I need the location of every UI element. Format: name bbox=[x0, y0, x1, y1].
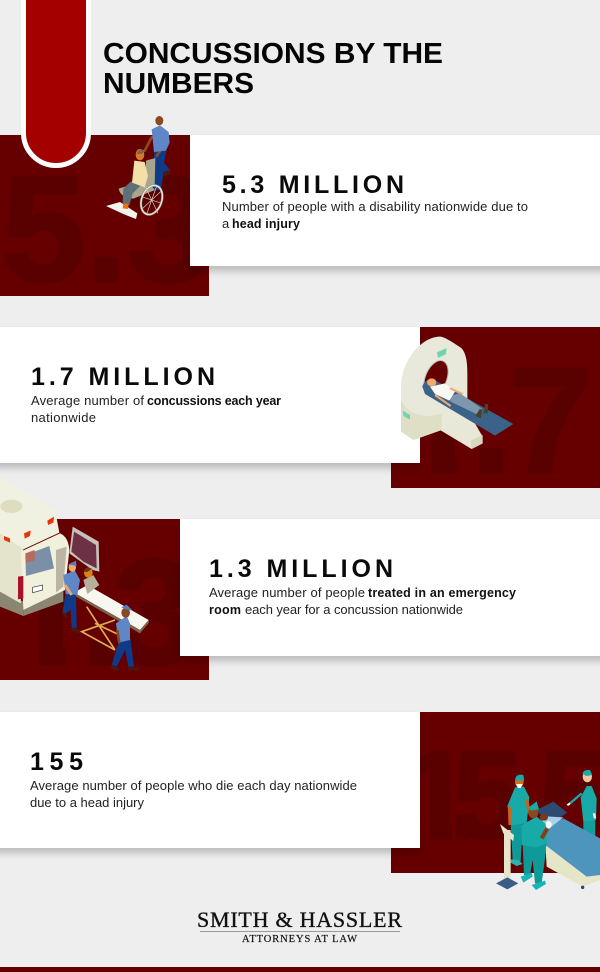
bed bbox=[545, 843, 600, 887]
panel: 1.7 million bbox=[0, 327, 600, 504]
white card: 5.3 million: head injury bbox=[232, 217, 300, 231]
stretcher bbox=[82, 607, 130, 650]
title bbox=[103, 38, 443, 100]
white card: 5.3 million bbox=[190, 135, 600, 266]
red pill tab bbox=[24, 0, 88, 165]
white card: 1.7 million bbox=[0, 327, 420, 463]
icon: surgical team around a patient bed bbox=[496, 770, 600, 890]
panel: 1.3 million bbox=[0, 519, 600, 696]
dark red block with ghost number 1.3: 1.3 bbox=[6, 528, 196, 696]
open rear door bbox=[69, 527, 99, 572]
IV stand bbox=[500, 824, 514, 841]
title: CONCUSSIONS BY THE bbox=[103, 38, 443, 70]
panel: 155 bbox=[0, 712, 600, 873]
logo: Smith & Hassler bbox=[197, 907, 402, 945]
bottom bar bbox=[0, 967, 600, 972]
white card: 1.3 million bbox=[180, 519, 600, 656]
medic two bbox=[112, 640, 134, 667]
medic one bbox=[63, 593, 77, 628]
dark red block with ghost number 5.3: 5.3 bbox=[2, 145, 211, 313]
icon: ambulance with medics and stretcher bbox=[0, 477, 149, 671]
white card: 1.3 million: each year for a concussion nationwide bbox=[245, 602, 463, 617]
white card: 5.3 million: 5.3 MILLION bbox=[222, 171, 404, 199]
white card: 1.3 million: treated in an emergency bbox=[368, 586, 516, 600]
white card: 5.3 million: a bbox=[222, 216, 230, 231]
logo: Smith & Hassler: SMITH & HASSLER bbox=[197, 907, 402, 932]
surgeon left bbox=[511, 823, 523, 862]
white card: 1.3 million: 1.3 MILLION bbox=[209, 555, 393, 583]
dark red block with ghost number 1.7: 1.7 bbox=[398, 336, 591, 504]
icon: MRI scanner with patient bbox=[401, 337, 513, 449]
white card: 1.3 million: room bbox=[209, 603, 241, 617]
white card: 1.3 million: Average number of people bbox=[209, 585, 365, 600]
white card: 1.7 million: nationwide bbox=[31, 410, 96, 425]
title: NUMBERS bbox=[103, 68, 254, 100]
logo: Smith & Hassler: ATTORNEYS AT LAW bbox=[242, 934, 357, 945]
surgeon front bbox=[523, 842, 547, 883]
white card: 155: Average number of people who die each day nationwide bbox=[30, 778, 357, 793]
white card: 1.7 million: Average number of bbox=[31, 393, 144, 408]
white card: 1.7 million: concussions each year bbox=[147, 394, 281, 408]
nurse bbox=[583, 818, 595, 838]
white card: 1.7 million: 1.7 MILLION bbox=[31, 363, 215, 391]
white card: 155 bbox=[0, 712, 420, 848]
icon: caregiver pushing wheelchair bbox=[106, 116, 171, 219]
white card: 155: 155 bbox=[30, 748, 83, 776]
white card: 155: due to a head injury bbox=[30, 795, 144, 810]
panel: 5.3 million bbox=[0, 135, 600, 313]
white card: 5.3 million: Number of people with a disability nationwide due to bbox=[222, 199, 528, 214]
